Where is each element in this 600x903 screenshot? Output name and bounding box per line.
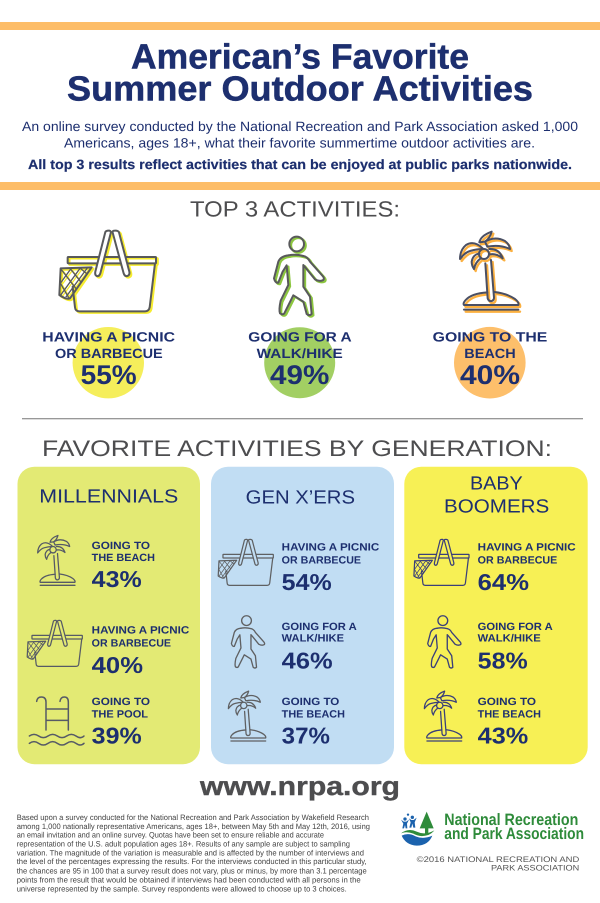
panel: baby boomers <box>404 467 588 764</box>
beach label <box>433 329 547 361</box>
title <box>67 38 533 108</box>
yellow circle <box>73 327 144 398</box>
panel: walk top activity <box>248 237 352 398</box>
icon: picnic basket <box>57 231 158 313</box>
icon: pool ladder <box>29 697 84 745</box>
pool stat: 39% <box>92 722 142 748</box>
icon: palm <box>228 691 266 741</box>
beach stat: THE BEACH <box>478 708 541 720</box>
icon: walker <box>428 616 461 668</box>
beach stat: 43% <box>92 566 142 592</box>
walk stat <box>478 621 553 673</box>
title: Summer Outdoor Activities <box>67 70 533 108</box>
millennials heading: MILLENNIALS <box>39 487 178 508</box>
intro text <box>22 119 578 172</box>
icon: palm <box>38 535 75 585</box>
copyright: PARK ASSOCIATION <box>491 864 580 872</box>
boomers heading: BABY <box>470 473 523 494</box>
walk label <box>248 329 352 361</box>
intro text: Americans, ages 18+, what their favorite summertime outdoor activities are. <box>64 136 535 150</box>
footnote: the chances are 95 in 100 that a survey result does not vary, plus or minus, by more than 3.1 percentage <box>17 866 367 875</box>
walk label: WALK/HIKE <box>257 346 343 361</box>
gen x heading: GEN X’ERS <box>246 487 355 508</box>
walk label: GOING FOR A <box>248 329 352 344</box>
beach label: BEACH <box>464 346 516 361</box>
walk percent: 49% <box>270 360 329 390</box>
footnote: an email invitation and an online survey. Quotas have been set to ensure reliable and accurate <box>17 831 324 840</box>
heading: top 3 activities: TOP 3 ACTIVITIES: <box>190 197 400 222</box>
walk stat: WALK/HIKE <box>478 633 541 645</box>
panel: millennials <box>18 467 200 764</box>
picnic stat: HAVING A PICNIC <box>92 625 190 637</box>
beach stat <box>478 696 541 748</box>
picnic label: HAVING A PICNIC <box>42 329 175 344</box>
icon: palm <box>424 691 462 741</box>
footnote: Based upon a survey conducted for the National Recreation and Park Association by Wakefield Research <box>17 813 369 822</box>
intro text: An online survey conducted by the National Recreation and Park Association asked 1,000 <box>22 119 578 134</box>
footnote: the level of the percentages expressing the results. For the interviews conducted in this particular study, <box>17 857 367 866</box>
website url: www.nrpa.org <box>199 771 400 801</box>
logo: nrpa <box>401 811 584 846</box>
panel: beach top activity <box>433 232 547 399</box>
picnic stat: 40% <box>92 652 143 678</box>
beach stat: GOING TO <box>282 696 339 708</box>
beach stat <box>282 696 345 748</box>
footnote: variation. The magnitude of the variation is measurable and is affected by the number of interviews and <box>17 848 364 857</box>
pool stat <box>92 696 150 748</box>
top orange bar <box>0 22 600 30</box>
footnote: among 1,000 nationally representative Americans, ages 18+, between May 5th and May 12th, 2016, using <box>17 822 370 831</box>
intro text: All top 3 results reflect activities that can be enjoyed at public parks nationwide. <box>28 157 572 172</box>
picnic stat: OR BARBECUE <box>92 638 171 650</box>
walk stat <box>282 621 357 673</box>
picnic stat: HAVING A PICNIC <box>282 542 380 554</box>
boomers heading <box>444 473 549 517</box>
picnic stat <box>92 625 190 678</box>
icon: walker <box>274 237 326 316</box>
footnote <box>17 813 370 893</box>
picnic stat <box>478 542 576 595</box>
logo wordmark <box>444 811 584 843</box>
footnote: universe represented by the sample. Survey respondents were allowed to choose up to 3 choices. <box>17 884 347 893</box>
picnic stat: HAVING A PICNIC <box>478 542 576 554</box>
icon: basket <box>26 620 82 666</box>
picnic percent: 55% <box>81 360 137 390</box>
footnote: points from the result that would be obtained if interviews had been conducted with all persons in the <box>17 875 361 884</box>
icon: basket <box>412 539 469 585</box>
walk stat: 58% <box>478 647 528 673</box>
picnic stat: OR BARBECUE <box>478 555 557 567</box>
pool stat: GOING TO <box>92 696 150 708</box>
panel: gen x <box>211 467 394 764</box>
panel: picnic top activity <box>42 231 175 398</box>
beach stat <box>92 540 155 592</box>
icon: palm island <box>460 232 520 312</box>
footnote: representation of the U.S. adult population ages 18+. Results of any sample are subject to sampling <box>17 839 350 848</box>
picnic stat: 64% <box>478 569 529 595</box>
icon: basket <box>217 539 273 585</box>
beach stat: GOING TO <box>478 696 536 708</box>
walk stat: 46% <box>282 647 333 673</box>
logo icon <box>401 812 434 846</box>
beach stat: 37% <box>282 722 330 748</box>
copyright <box>417 855 580 872</box>
walk stat: WALK/HIKE <box>282 633 344 645</box>
walk stat: GOING FOR A <box>478 621 553 633</box>
beach percent: 40% <box>460 360 520 390</box>
icon: walker <box>231 616 265 668</box>
beach stat: THE BEACH <box>92 552 155 564</box>
beach label: GOING TO THE <box>433 329 547 344</box>
second orange bar <box>0 182 600 190</box>
copyright: ©2016 NATIONAL RECREATION AND <box>417 855 580 864</box>
picnic stat: OR BARBECUE <box>282 555 361 567</box>
picnic label: OR BARBECUE <box>55 346 163 361</box>
picnic stat: 54% <box>282 569 332 595</box>
beach stat: 43% <box>478 722 528 748</box>
pool stat: THE POOL <box>92 708 149 720</box>
picnic label <box>42 329 175 361</box>
beach stat: THE BEACH <box>282 708 345 720</box>
walk stat: GOING FOR A <box>282 621 357 633</box>
logo wordmark: National Recreation <box>444 811 578 829</box>
beach stat: GOING TO <box>92 540 150 552</box>
boomers heading: BOOMERS <box>444 496 549 517</box>
title: American’s Favorite <box>131 38 469 76</box>
picnic stat <box>282 542 380 595</box>
heading: by generation: FAVORITE ACTIVITIES BY GENERATION: <box>42 436 552 461</box>
green circle <box>264 327 335 398</box>
orange circle <box>454 327 526 399</box>
